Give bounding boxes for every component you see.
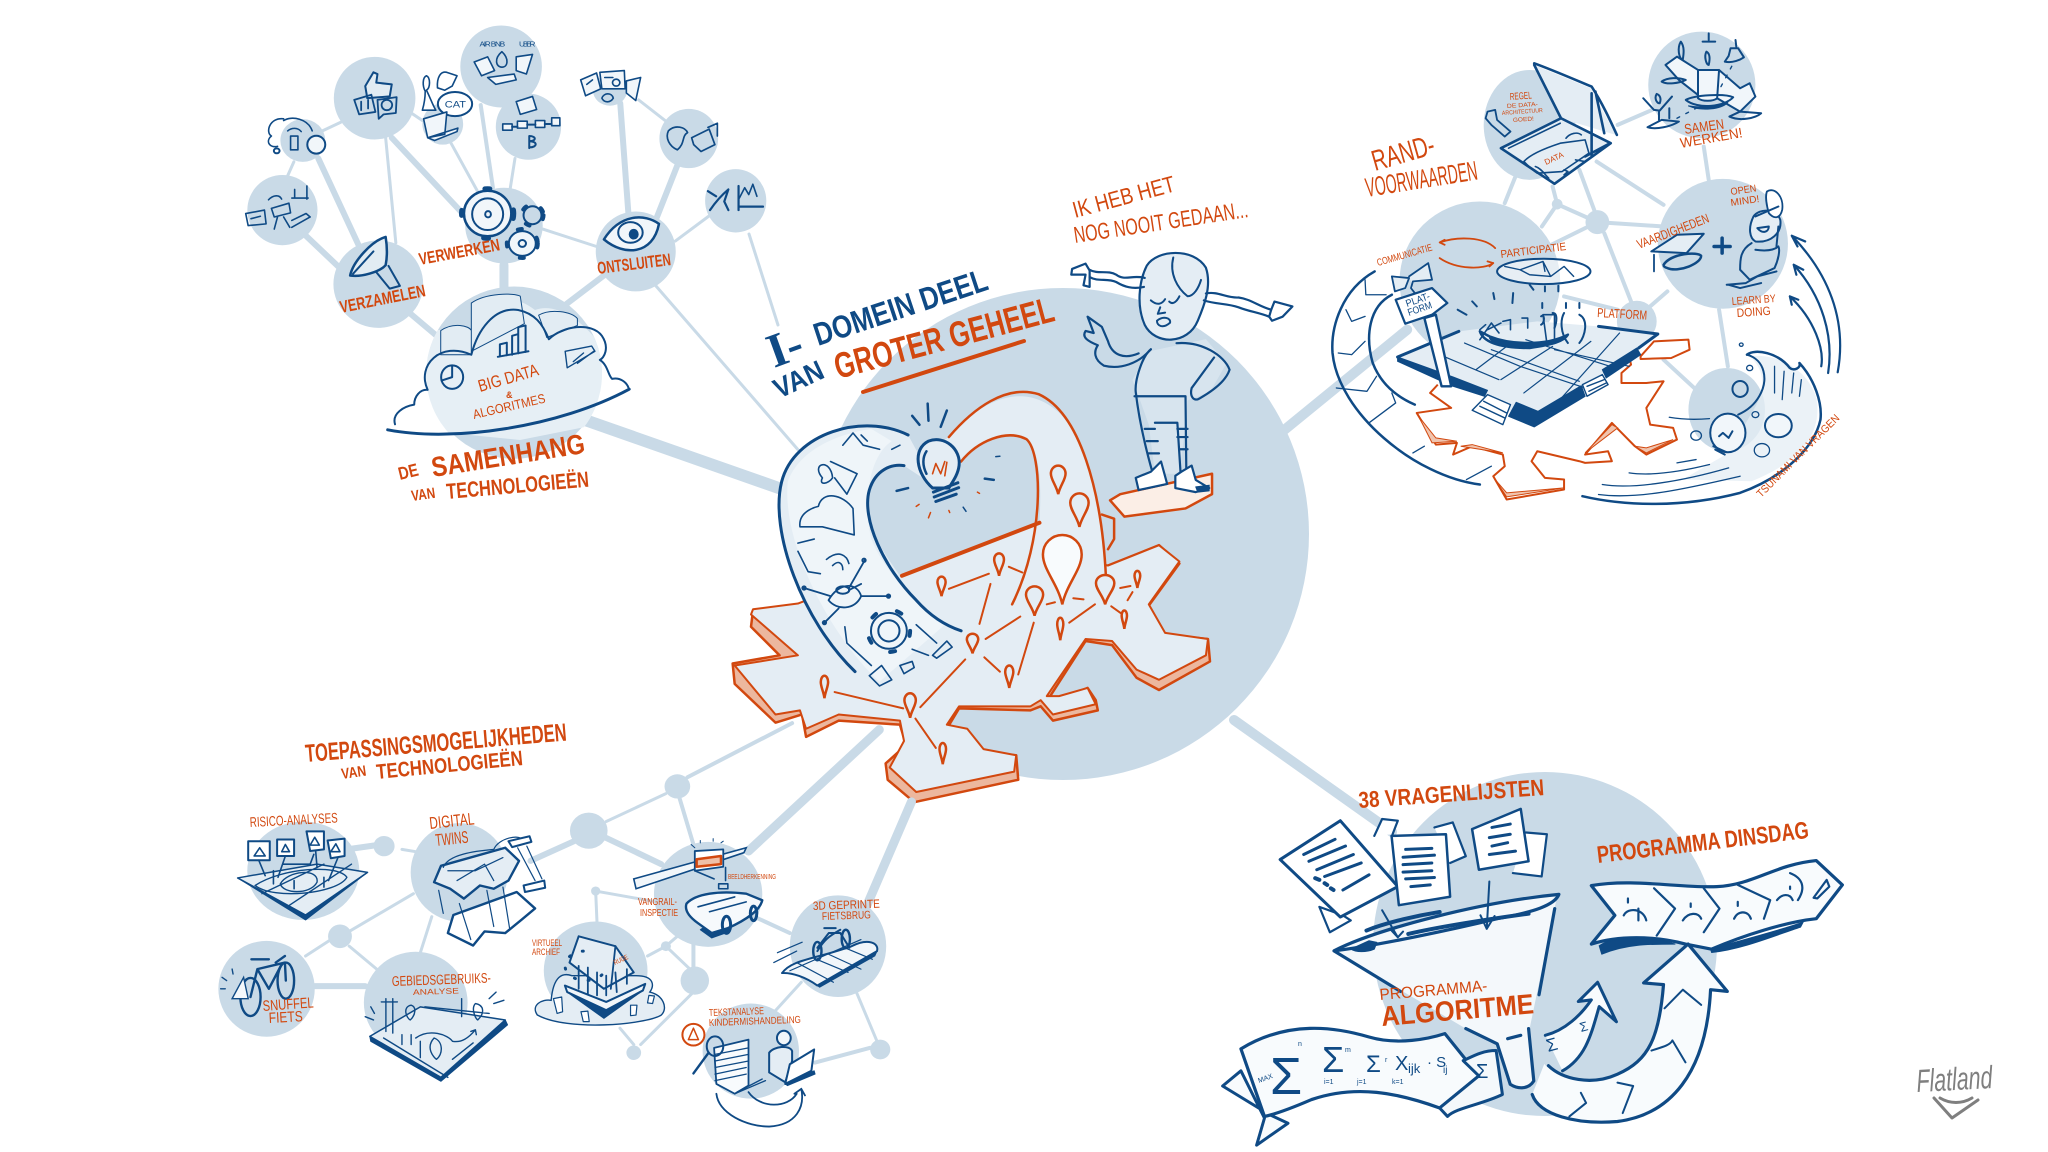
heading: toepassingsmogelijkheden: VAN: [340, 763, 367, 783]
heading: de samenhang: TECHNOLOGIEËN: [445, 467, 590, 504]
icon: big data cloud: &: [506, 390, 513, 400]
shoes: [1136, 462, 1209, 492]
icon: virtual archive building: [535, 936, 664, 1025]
labels: applications: BEELDHERKENNING: [728, 874, 776, 881]
labels: randvoorwaarden: LEARN BY: [1731, 293, 1777, 308]
ribbon heart shape: [779, 392, 1114, 682]
labels: applications: 3D GEPRINTE: [813, 897, 880, 913]
title: i-domein deel: I-: [760, 317, 810, 378]
tsunami wave and arrows: [1582, 236, 1840, 504]
braids: [1090, 270, 1271, 317]
network circles: [1400, 32, 1788, 451]
icon: graduation cap and open mind person: [1651, 190, 1782, 288]
network circles: [218, 774, 890, 1099]
formula text: i=1: [1324, 1079, 1334, 1086]
labels: applications: RUGE: [613, 954, 630, 967]
heading: de samenhang: VAN: [410, 485, 436, 505]
icon: big data cloud: [388, 294, 629, 440]
icon: ribbon programme with faces: [1591, 861, 1842, 954]
heading: programma-algoritme: PROGRAMMA-: [1379, 978, 1488, 1004]
title: i-domein deel: GROTER GEHEEL: [829, 289, 1058, 387]
connector: to vragenlijsten: [1234, 720, 1392, 832]
heading: de samenhang: [396, 428, 590, 505]
heading: randvoorwaarden: VOORWAARDEN: [1363, 156, 1480, 203]
icon: dashboards with eye: [581, 71, 641, 102]
icon: bicycle: [221, 956, 294, 1016]
icon: text analysis stack and person: [682, 1024, 815, 1127]
labels: randvoorwaarden: MIND!: [1730, 194, 1760, 209]
panel: de samenhang van technologieën: [246, 25, 766, 505]
icon: blockchain: [503, 96, 560, 148]
labels: applications: ANALYSE: [413, 986, 459, 997]
road arcs: [1332, 271, 1491, 485]
icon: apps and hands: [667, 123, 717, 152]
labels: laptop: ARCHITECTUUR: [1502, 108, 1544, 117]
main circle: [817, 288, 1309, 780]
labels: applications: SNUFFEL: [262, 994, 314, 1015]
formula text: m: [1345, 1047, 1351, 1054]
label: verwerken: VERWERKEN: [417, 235, 501, 269]
formula text: Σ: [1322, 1039, 1344, 1080]
labels: applications: RISICO-ANALYSES: [249, 809, 338, 830]
heading: randvoorwaarden: RAND-: [1368, 129, 1438, 178]
label: big data: BIG DATA: [476, 360, 541, 396]
sigma marks on small arrow: Σ: [1544, 1034, 1560, 1056]
title: i-domein deel: [760, 262, 1058, 404]
heading: programma dinsdag: PROGRAMMA DINSDAG: [1596, 817, 1810, 869]
labels: randvoorwaarden: SAMEN: [1683, 116, 1725, 137]
panel: central map, ribbon and girl: [733, 171, 1292, 802]
icon: eye ontsluiten: [604, 217, 659, 250]
heading: toepassingsmogelijkheden: TOEPASSINGSMOGELIJKHEDEN: [304, 719, 568, 768]
icon: samen werken people: [1643, 33, 1761, 128]
heading: programma-algoritme: ALGORITME: [1380, 988, 1535, 1032]
labels: laptop: DE DATA-: [1507, 102, 1538, 110]
labels: laptop: DATA: [1543, 150, 1566, 167]
formula text: Σ: [1366, 1051, 1381, 1078]
bows: [1071, 264, 1292, 321]
labels: applications: TWINS: [434, 828, 469, 850]
labels: laptop: [1502, 90, 1566, 167]
formula text: Σ: [1476, 1061, 1488, 1083]
icon: camera sensor: [246, 118, 325, 229]
background circle: [1373, 772, 1717, 1116]
formula text: j=1: [1356, 1079, 1367, 1086]
sigma marks on small arrow: [1544, 1018, 1590, 1056]
map of the Netherlands with extrusion: [733, 545, 1210, 802]
labels: randvoorwaarden: PLAT-: [1404, 291, 1432, 310]
formula text: ijk: [1408, 1061, 1421, 1076]
sigma marks on small arrow: Σ: [1578, 1018, 1590, 1035]
icon: airbnb uber: [474, 40, 536, 84]
labels: randvoorwaarden: OPEN: [1730, 183, 1757, 198]
icon: airbnb uber: AIR BNB: [479, 40, 505, 48]
label: ontsluiten: ONTSLUITEN: [596, 250, 672, 278]
icon: big data cloud: ALGORITMES: [471, 391, 547, 422]
formula text: k=1: [1392, 1079, 1404, 1086]
heading: randvoorwaarden: [1363, 129, 1480, 203]
connector: to analysis node: [749, 234, 778, 325]
labels: randvoorwaarden: DOING: [1736, 304, 1771, 320]
icon: chart and runner: [708, 184, 763, 210]
panel: randvoorwaarden: [1285, 32, 1842, 504]
signpost and loudspeakers: [1392, 263, 1451, 386]
icon: area usage map: [365, 992, 508, 1081]
labels: randvoorwaarden: VAARDIGHEDEN: [1635, 211, 1711, 252]
network lines: [1285, 110, 1728, 430]
lightbulb: [897, 404, 1000, 518]
network lines: [288, 100, 710, 339]
labels: applications: TEKSTANALYSE: [709, 1006, 764, 1019]
head: [1140, 253, 1208, 340]
laptop with data: [1486, 63, 1617, 184]
heading: toepassingsmogelijkheden: [304, 719, 568, 784]
panel: main circle with connectors: [585, 234, 1392, 832]
icon: funnel: [1334, 882, 1559, 1088]
panel: toepassingsmogelijkheden: [218, 719, 911, 1127]
girl character: [1071, 253, 1292, 517]
formula text: [1257, 1039, 1488, 1106]
labels: randvoorwaarden: WERKEN!: [1679, 124, 1744, 151]
participation table and people: [1440, 238, 1590, 348]
labels: randvoorwaarden: PARTICIPATIE: [1500, 241, 1567, 261]
labels: applications: [249, 809, 880, 1029]
icon: megaphone verzamelen: [350, 237, 400, 289]
icon: formula banner: [1223, 1028, 1502, 1145]
icon: chess and cat: CAT: [445, 100, 466, 110]
icon: question papers: [1280, 809, 1547, 932]
speech text: ik heb het: NOG NOOIT GEDAAN...: [1072, 196, 1250, 248]
heading: de samenhang: SAMENHANG: [429, 428, 587, 483]
location pins and network: [821, 466, 1140, 764]
icon: airbnb uber: UBER: [519, 40, 536, 48]
labels: applications: KINDERMISHANDELING: [709, 1015, 801, 1029]
labels: applications: INSPECTIE: [640, 908, 678, 919]
labels: applications: VIRTUEEL: [532, 938, 562, 948]
heading: toepassingsmogelijkheden: TECHNOLOGIEËN: [375, 747, 524, 784]
labels: randvoorwaarden: COMMUNICATIE: [1376, 243, 1434, 269]
labels: applications: ARCHIEF: [532, 947, 560, 957]
connector: to ontsluiten: [656, 286, 800, 452]
labels: applications: GEBIEDSGEBRUIKS-: [392, 970, 491, 989]
formula text: · S: [1427, 1054, 1446, 1071]
heading: 38 vragenlijsten: 38 VRAGENLIJSTEN: [1358, 774, 1545, 813]
speech text: ik heb het: IK HEB HET: [1070, 171, 1178, 223]
formula text: MAX: [1257, 1073, 1274, 1085]
icon: 3d printed bridge: [774, 928, 877, 987]
labels: applications: FIETSBRUG: [822, 909, 871, 923]
icon: curved arrow: [1532, 944, 1727, 1122]
icon: chess and cat: [422, 72, 472, 141]
formula text: ij: [1443, 1065, 1447, 1076]
labels: applications: VANGRAIL-: [638, 897, 677, 908]
platform under the girl: [1110, 474, 1212, 517]
platform board: [1398, 321, 1658, 427]
formula text: X: [1395, 1053, 1408, 1075]
title: i-domein deel: DOMEIN DEEL: [809, 262, 992, 353]
icon: social media: [354, 72, 397, 119]
icon: risk map: [238, 831, 368, 920]
body: [1132, 339, 1226, 474]
network lines: [306, 723, 911, 1063]
orange map outline: [1417, 340, 1690, 500]
icon: sensors and apps: [246, 40, 763, 229]
labels: laptop: GOED!: [1513, 117, 1534, 124]
ribbon technology icons: [798, 433, 952, 686]
labels: laptop: REGEL: [1509, 90, 1532, 103]
labels: applications: FIETS: [268, 1008, 303, 1027]
labels: randvoorwaarden: [1376, 116, 1842, 500]
icon: gears verwerken: [462, 189, 544, 258]
labels: randvoorwaarden: FORM: [1406, 300, 1434, 319]
network circles: [247, 25, 766, 459]
icon: guardrail and inspection car: [634, 839, 762, 938]
connector: to big data: [585, 420, 790, 492]
logo: flatland: Flatland: [1915, 1059, 1994, 1099]
panel: programma dinsdag: [1223, 772, 1842, 1145]
icon: digital twins maps: [434, 836, 545, 946]
speech text: ik heb het: [1070, 171, 1250, 248]
formula text: n: [1298, 1041, 1302, 1048]
logo: flatland: [1915, 1059, 1994, 1118]
label: verzamelen: VERZAMELEN: [338, 281, 427, 317]
labels: randvoorwaarden: TSUNAMI VAN VRAGEN: [1755, 412, 1842, 500]
formula text: Σ: [1270, 1048, 1302, 1106]
labels: randvoorwaarden: PLATFORM: [1597, 305, 1648, 323]
title: i-domein deel: VAN: [768, 354, 829, 404]
formula text: r: [1385, 1057, 1388, 1064]
heading: de samenhang: DE: [396, 460, 420, 484]
labels: applications: DIGITAL: [428, 809, 475, 833]
